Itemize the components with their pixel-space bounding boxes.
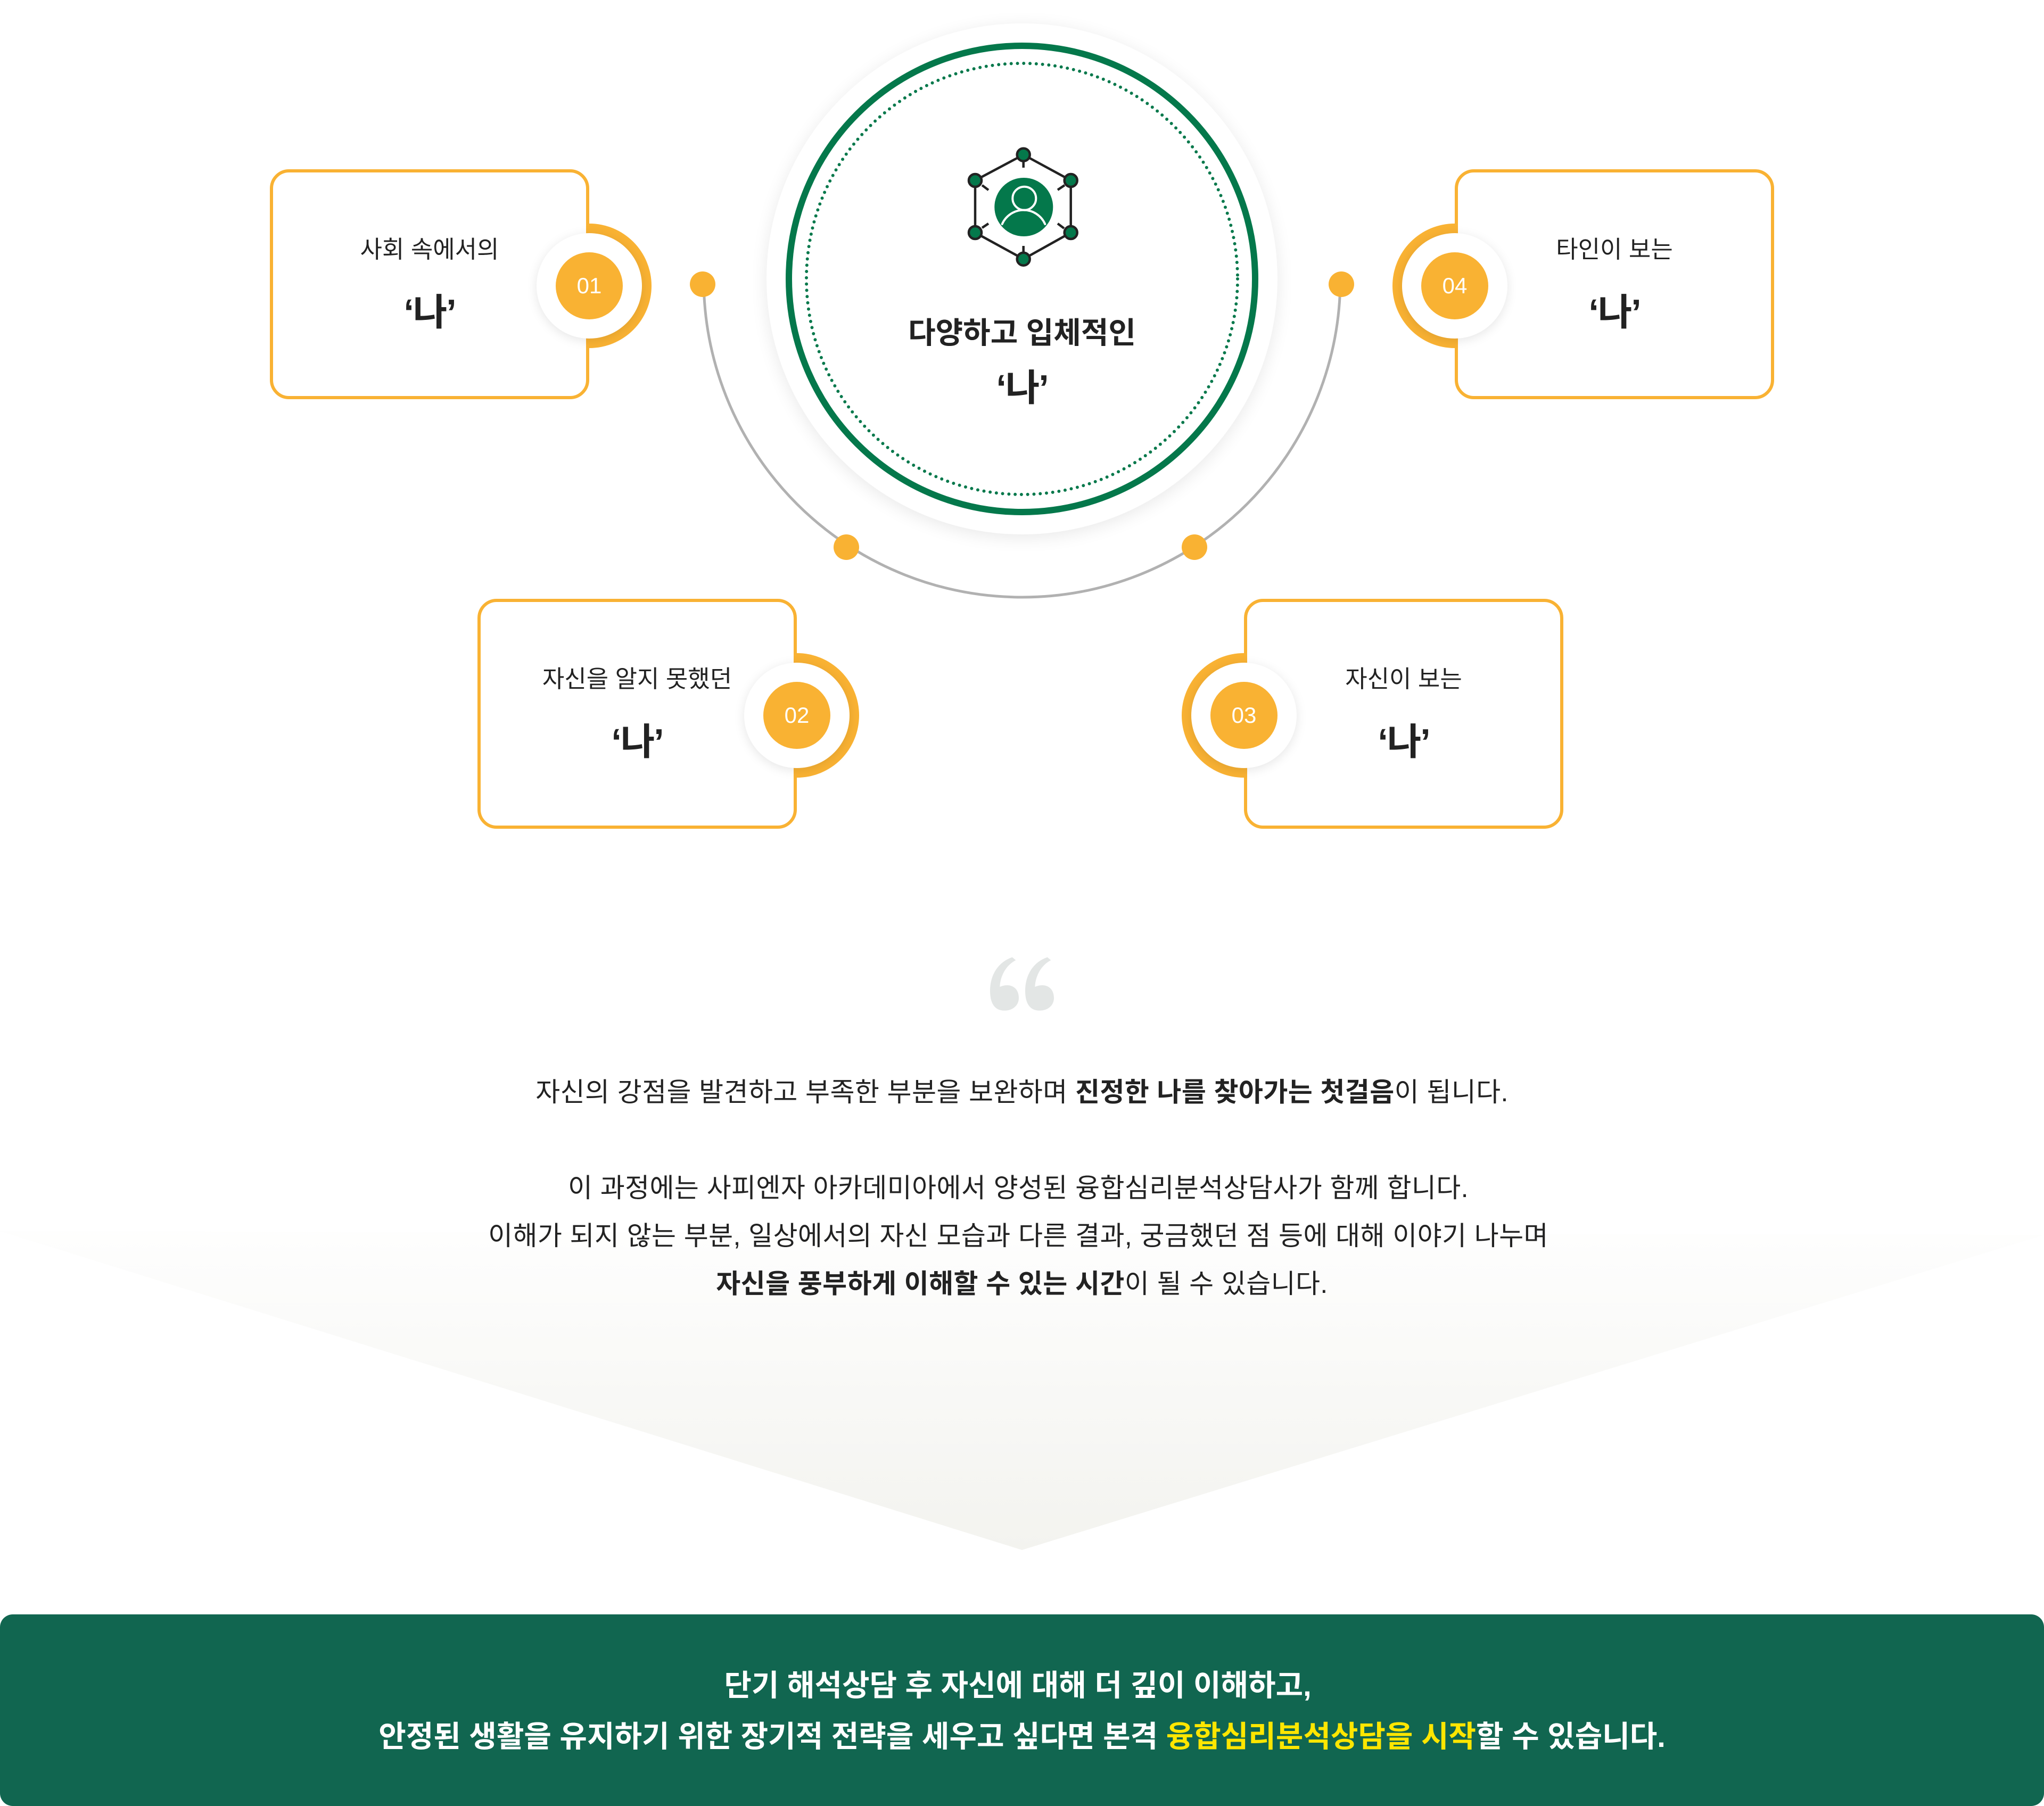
badge disc 02 xyxy=(744,663,850,768)
text block: description: 자신을 풍부하게 이해할 수 있는 시간이 될 수 있습니다. xyxy=(716,1269,1328,1299)
text block: description xyxy=(488,1173,1548,1299)
connector dot xyxy=(690,271,715,297)
badge number 04: 04 xyxy=(1443,273,1467,298)
text block: description: 이해가 되지 않는 부분, 일상에서의 자신 모습과 다른 결과, 궁금했던 점 등에 대해 이야기 나누며 xyxy=(488,1221,1548,1251)
badge number 02 xyxy=(763,682,830,749)
badge number 01: 01 xyxy=(577,273,601,298)
badge number 01 xyxy=(556,252,623,319)
badge number 03: 03 xyxy=(1232,703,1256,728)
icon: person network xyxy=(968,147,1078,267)
banner text: 안정된 생활을 유지하기 위한 장기적 전략을 세우고 싶다면 본격 융합심리분석상담을 시작할 수 있습니다. xyxy=(378,1720,1666,1753)
badge disc 01 xyxy=(537,233,642,339)
badge number 03 xyxy=(1210,682,1278,749)
banner text xyxy=(378,1669,1666,1753)
card 02 xyxy=(477,599,797,829)
card 03 label: 자신이 보는 xyxy=(1345,665,1462,692)
card 02 label: 자신을 알지 못했던 xyxy=(542,665,732,692)
connector dot xyxy=(1182,534,1207,560)
badge ring 01 xyxy=(527,224,652,348)
connector dot xyxy=(834,534,859,560)
center title: ‘나’ xyxy=(996,367,1048,409)
badge ring 03 xyxy=(1182,653,1306,778)
badge ring 04 xyxy=(1392,224,1517,348)
badge disc 03 xyxy=(1191,663,1297,768)
card 04 title: ‘나’ xyxy=(1588,292,1641,333)
badge number 02: 02 xyxy=(785,703,809,728)
green rings xyxy=(786,43,1258,515)
icon: quotation mark xyxy=(990,957,1054,1010)
connector dot xyxy=(1329,271,1354,297)
banner text: 단기 해석상담 후 자신에 대해 더 깊이 이해하고, xyxy=(724,1669,1312,1702)
card 04 label: 타인이 보는 xyxy=(1556,236,1673,263)
text block: intro line: 자신의 강점을 발견하고 부족한 부분을 보완하며 진정한 나를 찾아가는 첫걸음이 됩니다. xyxy=(535,1077,1509,1107)
card 03 title: ‘나’ xyxy=(1378,721,1430,763)
badge disc 04 xyxy=(1402,233,1507,339)
card 01 title: ‘나’ xyxy=(403,292,456,333)
card 03 xyxy=(1244,599,1563,829)
card 02 title: ‘나’ xyxy=(611,721,663,763)
card 01 label: 사회 속에서의 xyxy=(360,236,499,263)
badge ring 02 xyxy=(735,653,859,778)
card 01 xyxy=(270,169,589,399)
panel: central circle xyxy=(767,23,1278,534)
text block: description: 이 과정에는 사피엔자 아카데미아에서 양성된 융합심리분석상담사가 함께 합니다. xyxy=(568,1173,1469,1203)
card 04 xyxy=(1455,169,1774,399)
badge number 04 xyxy=(1421,252,1488,319)
panel: green banner xyxy=(0,1614,2044,1806)
connecting arc xyxy=(703,296,1341,598)
center heading: 다양하고 입체적인 xyxy=(908,316,1136,350)
